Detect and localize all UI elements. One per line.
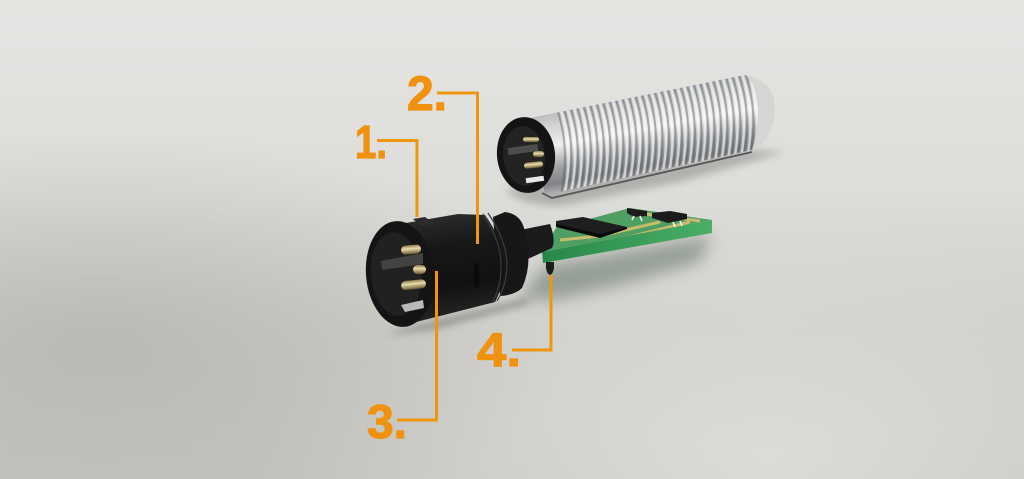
connector blade bottom bbox=[401, 300, 424, 312]
small chip right bbox=[652, 211, 687, 223]
connector shadow bbox=[385, 297, 530, 335]
threaded metal tube with connector bbox=[493, 71, 785, 206]
probe tip bbox=[546, 262, 554, 275]
connector rim bbox=[362, 218, 438, 330]
number 4: 4. bbox=[477, 323, 521, 376]
board front edge bbox=[542, 220, 712, 263]
connector blade top bbox=[381, 253, 423, 270]
chip leads bbox=[632, 216, 682, 227]
callout 3 bbox=[367, 271, 436, 448]
connector pins bbox=[401, 244, 426, 290]
callout 4 bbox=[477, 275, 551, 376]
connector well bbox=[367, 230, 425, 318]
tube threads bbox=[556, 71, 757, 194]
small chip left bbox=[627, 208, 647, 217]
callout 1 bbox=[355, 116, 417, 217]
side slot bbox=[474, 263, 479, 288]
number 1: 1. bbox=[355, 116, 387, 168]
top key tab bbox=[413, 217, 435, 226]
tube connector well bbox=[500, 124, 548, 188]
board shadow bbox=[520, 235, 712, 300]
leader line 2 bbox=[437, 93, 478, 244]
tube connector pins bbox=[508, 137, 544, 183]
callout 2 bbox=[407, 68, 478, 244]
rear collar bbox=[493, 212, 529, 296]
number 3: 3. bbox=[367, 395, 407, 448]
black connector bbox=[362, 212, 554, 335]
board traces bbox=[560, 212, 700, 244]
leader line 1 bbox=[377, 140, 417, 217]
tube shadow bbox=[505, 150, 785, 206]
leader line 4 bbox=[512, 275, 551, 350]
tube connector rim bbox=[493, 114, 559, 196]
large chip bbox=[556, 217, 627, 236]
number 2: 2. bbox=[407, 68, 447, 121]
tube body bbox=[530, 75, 758, 195]
leader line 3 bbox=[397, 271, 436, 420]
main body bbox=[400, 214, 504, 326]
circuit board bbox=[520, 208, 712, 300]
tube lower edge bbox=[542, 152, 752, 198]
rear stem bbox=[520, 224, 554, 262]
body ribs bbox=[483, 213, 507, 303]
board top surface bbox=[542, 208, 712, 252]
tube end cap bbox=[745, 75, 775, 151]
